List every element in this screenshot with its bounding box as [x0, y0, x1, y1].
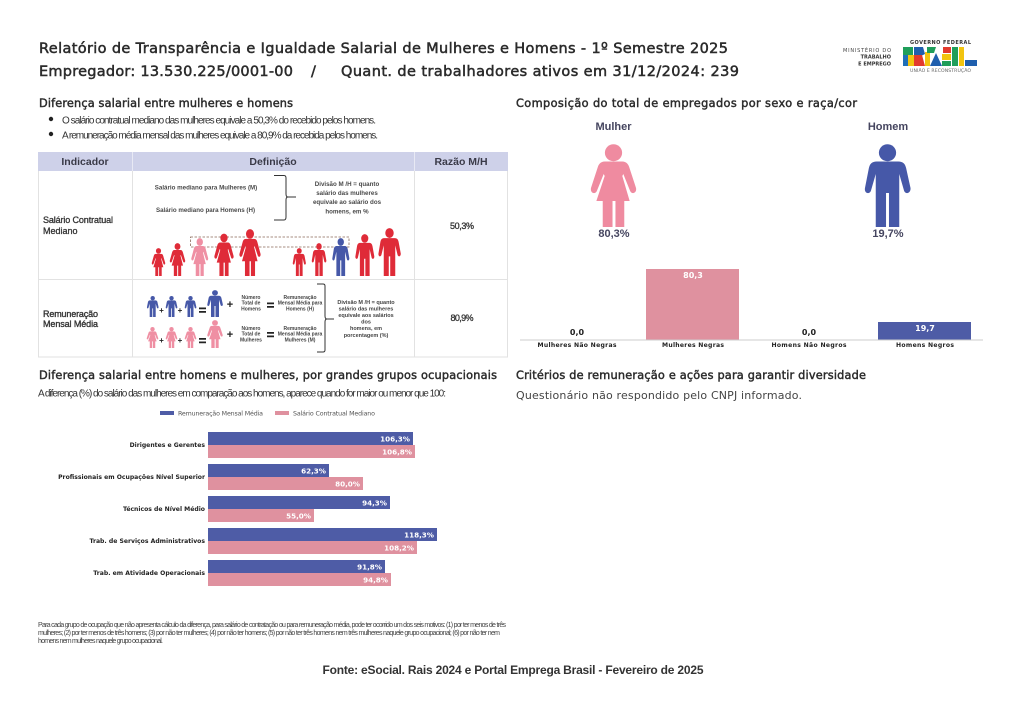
table header: Indicador: [61, 156, 109, 168]
row label: remuneração mensal média: Mensal Média: [43, 319, 98, 329]
icons: women ordered: [152, 229, 261, 276]
text block: bullets: [49, 116, 378, 142]
title: Empregador: 13.530.225/0001-00: [39, 64, 293, 80]
text: número total: Número: [242, 326, 260, 332]
definition text: divisão M/H: equivale ao salário dos: [313, 199, 382, 206]
bar chart: sexo e raça: 0,0: [802, 328, 817, 337]
title: Quant. de trabalhadores ativos em 31/12/2024: 239: [341, 64, 739, 80]
group: profissionais: 62,3%: [301, 466, 326, 475]
definition text: remuneração M/H: porcentagem (%): [344, 333, 388, 339]
table header: Definição: [249, 156, 297, 168]
group: dirigentes: Dirigentes e Gerentes: [130, 442, 205, 449]
group: operacionais: [93, 560, 391, 586]
operators: +: [178, 306, 183, 315]
definition text: medianos: [155, 184, 257, 214]
icons: men average: [147, 290, 223, 317]
operators: +: [227, 299, 233, 311]
text: número total: Mulheres: [240, 338, 262, 344]
bar chart: sexo e raça: Mulheres Não Negras: [538, 342, 617, 349]
group: dirigentes: 106,8%: [382, 447, 412, 456]
dashed median box: [190, 237, 349, 247]
definition text: remuneração M/H: homens, em: [350, 326, 382, 332]
logo: ministério: E EMPREGO: [858, 62, 891, 68]
bar chart: sexo e raça: Homens Negros: [896, 342, 954, 349]
operators: [159, 299, 274, 345]
text: remuneração média: Remuneração: [283, 326, 317, 332]
row label: remuneração mensal média: Remuneração: [43, 309, 98, 319]
text: remuneração média: Mensal Média para: [278, 332, 322, 338]
icon: homem: 19,7%: [872, 228, 904, 240]
heading: diferença salarial: Diferença salarial entre mulheres e homens: [39, 97, 293, 110]
group: profissionais: 80,0%: [335, 479, 360, 488]
group: serviços administrativos: Trab. de Serviços Administrativos: [89, 538, 205, 545]
icon: homem: Homem: [868, 121, 908, 133]
operators: +: [159, 306, 164, 315]
source: Fonte: eSocial. Rais 2024 e Portal Emprega Brasil - Fevereiro de 2025: [322, 663, 704, 677]
title: [39, 41, 739, 80]
logo: ministério: MINISTÉRIO DO: [843, 46, 891, 54]
group: dirigentes: [130, 432, 415, 458]
group: técnicos: [123, 496, 390, 522]
logo: governo federal: GOVERNO FEDERAL: [910, 40, 972, 46]
definition text: divisão M/H: homens, em %: [325, 208, 369, 216]
group: técnicos: 55,0%: [286, 511, 311, 520]
bar chart: sexo e raça: 80,3: [683, 271, 703, 280]
icon: mulher: Mulher: [595, 121, 632, 133]
title: Relatório de Transparência e Igualdade Salarial de Mulheres e Homens - 1º Semestre 2025: [39, 41, 728, 57]
definition text: medianos: Salário mediano para Homens (H): [156, 207, 255, 214]
text block: questionário: Questionário não respondido pelo CNPJ informado.: [516, 389, 802, 402]
definition text: medianos: Salário mediano para Mulheres (M): [155, 184, 257, 192]
group: operacionais: Trab. em Atividade Operacionais: [93, 570, 205, 577]
legend: [160, 410, 375, 418]
definition text: remuneração M/H: Divisão M /H = quanto: [337, 300, 395, 306]
group: técnicos: Técnicos de Nível Médio: [123, 505, 205, 513]
group: operacionais: 94,8%: [363, 575, 388, 584]
bar chart: sexo e raça: Homens Não Negros: [772, 342, 847, 349]
group: técnicos: 94,3%: [362, 498, 387, 507]
logo: ministério: [843, 46, 891, 68]
group: serviços administrativos: 118,3%: [404, 530, 434, 539]
text: remuneração média: Mensal Média para: [278, 300, 322, 306]
brace: mediano: [274, 176, 296, 220]
group: serviços administrativos: 108,2%: [384, 543, 414, 552]
logo: governo federal: UNIÃO E RECONSTRUÇÃO: [910, 67, 971, 74]
group: profissionais: Profissionais em Ocupações Nível Superior: [58, 473, 205, 481]
footnote: homens nem mulheres naquele grupo ocupacional.: [38, 638, 163, 645]
icons: men ordered: [293, 228, 401, 276]
definition text: divisão M/H: salário das mulheres: [316, 190, 378, 197]
text: remuneração média: Mulheres (M): [285, 338, 316, 344]
icon: mulher: 80,3%: [598, 228, 630, 240]
text block: bullets: A remuneração média mensal das mulheres equivale a 80,9% da recebida pelos homens.: [62, 130, 378, 142]
operators: +: [178, 336, 183, 345]
heading: composição: Composição do total de empregados por sexo e raça/cor: [516, 97, 857, 110]
footnote: mulheres; (2) por ter menos de três homens; (3) por não ter mulheres; (4) por não ter homens; (5) por não ter três homens nem três mulheres naquele grupo ocupacional; (6) por não ter nem: [38, 630, 500, 637]
icons: women average: [147, 320, 223, 348]
table grid: [38, 171, 508, 357]
brace: remuneração: [317, 284, 334, 352]
row label: salário contratual mediano: Mediano: [43, 226, 78, 236]
definition text: remuneração M/H: salário das mulheres: [339, 306, 393, 312]
group: serviços administrativos: [89, 528, 437, 554]
text block: subtítulo: A diferença (%) do salário das mulheres em comparação aos homens, aparece quando for maior ou menor que 100:: [38, 388, 446, 400]
heading: diferença por grupos: Diferença salarial entre homens e mulheres, por grandes grupos ocupacionais: [39, 369, 497, 382]
text: número total: Total de: [242, 332, 261, 338]
logo: ministério: TRABALHO: [861, 54, 891, 60]
title: /: [311, 64, 316, 80]
definition text: divisão M/H: Divisão M /H = quanto: [315, 181, 379, 188]
row label: salário contratual mediano: Salário Contratual: [43, 215, 113, 225]
bar chart: grupos ocupacionais: [58, 432, 437, 586]
bar chart: sexo e raça: Mulheres Negras: [662, 342, 724, 349]
text block: bullets: O salário contratual mediano das mulheres equivale a 50,3% do recebido pelos homens.: [62, 116, 376, 126]
icon: homem: [865, 121, 911, 240]
definition text: remuneração M/H: equivale aos salários: [338, 313, 394, 319]
text: remuneração média: [278, 295, 322, 344]
icon: mulher: [591, 121, 636, 240]
operators: +: [227, 329, 233, 341]
text: número total: Homens: [241, 306, 261, 312]
legend: Salário Contratual Mediano: [293, 410, 375, 418]
panel: tabela de indicadores: [38, 152, 508, 357]
heading: critérios: Critérios de remuneração e ações para garantir diversidade: [516, 369, 866, 382]
text: número total: [240, 295, 262, 344]
text: número total: Total de: [242, 300, 261, 306]
group: profissionais: [58, 464, 363, 490]
text: remuneração média: Remuneração: [283, 295, 317, 301]
bar chart: sexo e raça: 0,0: [570, 328, 585, 337]
bar chart: sexo e raça: [520, 269, 983, 349]
value: razão mediano: 50,3%: [450, 221, 474, 231]
logo: governo federal: [903, 40, 977, 74]
definition text: remuneração M/H: dos: [361, 320, 371, 326]
table header: Razão M/H: [434, 156, 488, 168]
text: número total: Número: [242, 295, 260, 301]
legend: Remuneração Mensal Média: [178, 410, 263, 418]
text: remuneração média: Homens (H): [286, 306, 314, 312]
operators: +: [159, 336, 164, 345]
footnote: Para cada grupo de ocupação que não apresenta cálculo da diferença, para salário de contratação ou para remuneração média, pode ter ocorrido um dos seis motivos: (1) por ter menos de três: [38, 622, 507, 629]
value: razão média: 80,9%: [450, 313, 474, 323]
group: dirigentes: 106,3%: [380, 434, 410, 443]
group: operacionais: 91,8%: [357, 562, 382, 571]
table header: [38, 152, 508, 171]
bar chart: sexo e raça: 19,7: [915, 324, 935, 333]
